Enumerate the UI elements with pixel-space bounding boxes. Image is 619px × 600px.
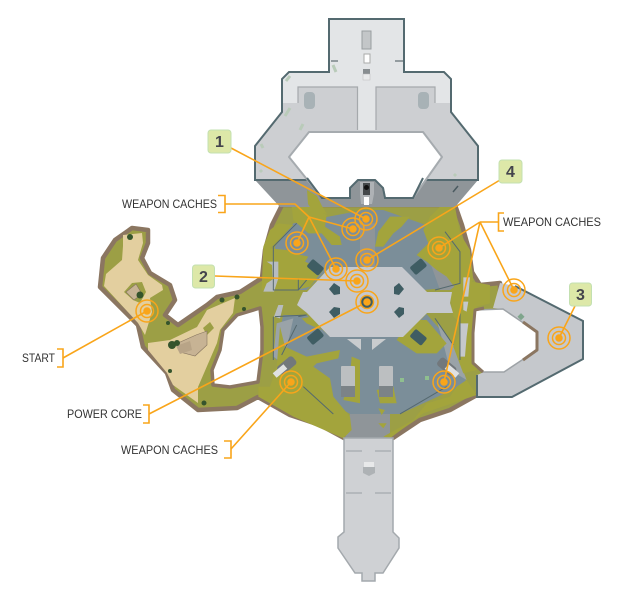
number badge 3: 3: [576, 287, 585, 304]
number badge 4: [499, 160, 522, 183]
label: weapon caches south: WEAPON CACHES: [121, 443, 218, 457]
marker: cache north-west: [286, 232, 308, 254]
label: weapon caches north-west: WEAPON CACHES: [122, 197, 217, 211]
cave hole west: [212, 308, 262, 387]
marker: cache south-west: [280, 371, 302, 393]
south building: [338, 438, 399, 581]
vehicle bays: [273, 355, 459, 382]
north building central hole: [289, 132, 442, 198]
label: weapon caches east: [498, 213, 601, 231]
marker: objective 1: [355, 208, 377, 230]
landing pads south of plaza: [341, 339, 393, 397]
number badge 2: [192, 265, 214, 288]
central base floor: [212, 205, 490, 438]
target markers: [136, 208, 570, 393]
plaza bunkers: [329, 283, 404, 318]
rocks and trees on the beach: [126, 234, 246, 406]
marker: objective 2: [346, 270, 368, 292]
corridor walls: [273, 223, 460, 414]
north building details: [260, 31, 458, 192]
olive overgrowth patches: [250, 205, 490, 438]
number badge 1: 1: [215, 134, 224, 151]
marker: objective 4: [356, 249, 378, 271]
number badge 2: 2: [199, 269, 208, 286]
number badge 4: 4: [506, 164, 515, 181]
marker: cache east wing: [503, 279, 525, 301]
marker: power core: [356, 291, 378, 313]
marker: start: [136, 300, 158, 322]
marker: objective 3: [548, 327, 570, 349]
north building: [255, 19, 478, 207]
beach sand: [104, 233, 235, 403]
terrain: island with brown rock edge: [100, 205, 500, 438]
orange leader lines: [63, 148, 575, 449]
label: power core: POWER CORE: [67, 407, 142, 421]
turrets: [306, 258, 427, 346]
east cave hole: [473, 309, 537, 372]
number badge 1: [208, 130, 231, 153]
marker: cache north centre: [342, 218, 364, 240]
marker: cache west plaza: [325, 258, 347, 280]
marker: cache north-east: [428, 237, 450, 259]
power core gate: [360, 182, 374, 205]
number badge 3: [570, 283, 592, 306]
central plaza: [297, 267, 453, 337]
marker: cache south-east: [433, 371, 455, 393]
east wing: [473, 283, 583, 397]
label: weapon caches east: WEAPON CACHES: [503, 215, 601, 229]
label: start: START: [22, 351, 56, 365]
slate floor: [273, 210, 467, 438]
olive patch on north band: [307, 190, 327, 214]
